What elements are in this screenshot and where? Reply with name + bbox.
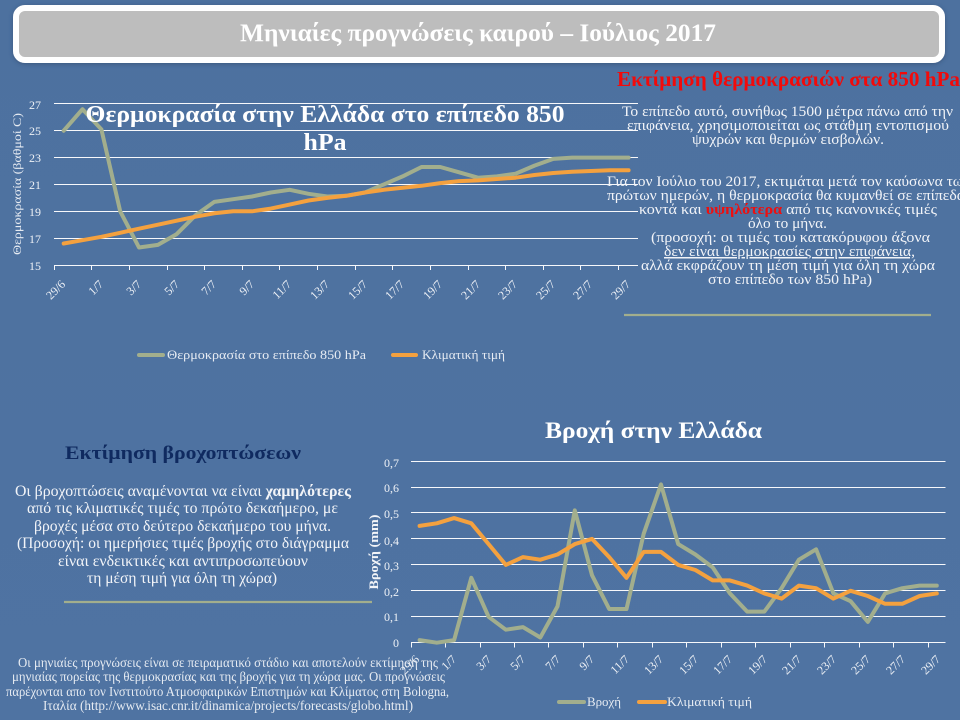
x axis labels: 21/7 — [458, 277, 483, 302]
y axis labels: 0,6 — [384, 481, 399, 495]
description: αλλά εκφράζουν τη μέση τιμή για όλη τη χώρα — [641, 258, 935, 274]
x axis labels: 15/7 — [345, 277, 370, 302]
y axis labels: 0,7 — [384, 456, 399, 470]
y axis labels: 15 — [29, 259, 41, 273]
x axis labels: 9/7 — [236, 277, 257, 298]
rainfall line chart — [366, 418, 946, 709]
x axis labels: 27/7 — [883, 652, 908, 677]
description: (Προσοχή: οι ημερήσιες τιμές βροχής στο διάγραμμα — [17, 535, 349, 552]
x axis labels: 7/7 — [198, 277, 219, 298]
description: στο επίπεδο των 850 hPa) — [708, 272, 872, 288]
description: κοντά και υψηλότερα από τις κανονικές τιμές — [639, 202, 937, 218]
x axis labels: 17/7 — [710, 652, 735, 677]
x axis labels: 19/7 — [745, 652, 770, 677]
chart title: Θερμοκρασία στην Ελλάδα στο επίπεδο 850 — [86, 102, 564, 128]
title banner — [16, 8, 942, 60]
x axis labels: 3/7 — [123, 277, 144, 298]
y axis labels: 19 — [29, 205, 41, 219]
climatological series — [64, 170, 629, 244]
x axis labels: 9/7 — [576, 652, 597, 673]
description: πρώτων ημερών, η θερμοκρασία θα κυμανθεί σε επίπεδα — [607, 188, 960, 204]
chart title: Βροχή στην Ελλάδα — [545, 418, 762, 443]
chart title: hPa — [304, 130, 346, 156]
x axis labels: 11/7 — [269, 277, 294, 302]
x axis labels — [43, 277, 633, 302]
x axis labels: 19/7 — [420, 277, 445, 302]
description: Το επίπεδο αυτό, συνήθως 1500 μέτρα πάνω από την — [622, 104, 953, 120]
x axis labels: 11/7 — [607, 652, 632, 677]
x axis labels: 23/7 — [495, 277, 520, 302]
y axis labels: 0 — [393, 636, 399, 650]
title banner: Μηνιαίες προγνώσεις καιρού – Ιούλιος 2017 — [240, 20, 716, 47]
description: επιφάνεια, χρησιμοποιείται ως στάθμη εντοπισμού — [627, 118, 949, 134]
legend — [559, 694, 752, 709]
x axis labels: 1/7 — [85, 277, 106, 298]
heading: Εκτίμηση βροχοπτώσεων — [65, 443, 302, 464]
description: από τις κλιματικές τιμές το πρώτο δεκαήμερο, με — [27, 500, 338, 517]
y axis labels: 0,1 — [384, 610, 399, 624]
y axis labels: 21 — [29, 178, 41, 192]
y axis labels: 0,3 — [384, 559, 399, 573]
panel: 850 hPa estimate text — [607, 67, 960, 288]
temperature series — [64, 109, 629, 248]
x axis labels: 27/7 — [570, 277, 595, 302]
y axis labels: 0,4 — [384, 534, 399, 548]
legend: Βροχή — [587, 694, 621, 709]
x axis labels: 29/7 — [608, 277, 633, 302]
climatological series — [420, 518, 937, 604]
x axis labels: 13/7 — [641, 652, 666, 677]
x axis labels: 17/7 — [382, 277, 407, 302]
legend: Κλιματική τιμή — [422, 348, 505, 362]
x axis labels: 5/7 — [507, 652, 528, 673]
description: βροχές μέσα στο δεύτερο δεκαήμερο του μήνα. — [34, 518, 331, 535]
legend — [139, 348, 505, 362]
rainfall series — [420, 484, 937, 643]
y axis labels: 27 — [29, 98, 41, 112]
y axis labels: 0,2 — [384, 585, 399, 599]
x axis labels: 29/6 — [43, 277, 68, 302]
y axis labels — [384, 456, 399, 650]
description: όλο το μήνα. — [748, 216, 827, 232]
y axis labels — [29, 98, 41, 273]
description — [607, 104, 960, 288]
heading: Εκτίμηση θερμοκρασιών στα 850 hPa — [617, 67, 960, 91]
x axis labels: 5/7 — [161, 277, 182, 298]
legend: Θερμοκρασία στο επίπεδο 850 hPa — [167, 348, 367, 362]
x axis labels: 21/7 — [779, 652, 804, 677]
description: ψυχρών και θερμών εισβολών. — [692, 132, 884, 148]
description: τη μέση τιμή για όλη τη χώρα) — [87, 570, 277, 587]
footnote: Οι μηνιαίες προγνώσεις είναι σε πειραματικό στάδιο και αποτελούν εκτίμηση της — [18, 655, 439, 670]
footnote: παρέχονται απο τον Ινστιτούτο Ατμοσφαιρικών Επιστημών και Κλίματος στη Bologna, — [6, 684, 449, 699]
description: (προσοχή: οι τιμές του κατακόρυφου άξονα — [651, 230, 930, 246]
x axis labels: 25/7 — [533, 277, 558, 302]
legend: Κλιματική τιμή — [667, 694, 752, 709]
temperature line chart — [12, 98, 638, 362]
y axis title: Θερμοκρασία (βαθμοί C) — [12, 113, 24, 255]
y axis labels: 25 — [29, 124, 41, 138]
chart title — [86, 102, 564, 156]
footnote: Ιταλία (http://www.isac.cnr.it/dinamica/projects/forecasts/globo.html) — [43, 698, 413, 713]
y axis title: Βροχή (mm) — [366, 514, 381, 590]
footnote — [6, 655, 449, 713]
x axis labels: 29/7 — [918, 652, 943, 677]
x axis labels: 1/7 — [438, 652, 459, 673]
x axis labels: 29/6 — [397, 652, 422, 677]
y axis labels: 23 — [29, 151, 41, 165]
description — [15, 483, 351, 587]
x axis labels: 13/7 — [307, 277, 332, 302]
x axis labels: 23/7 — [814, 652, 839, 677]
y axis labels: 0,5 — [384, 507, 399, 521]
footnote: μηνιαίας πορείας της θερμοκρασίας και της βροχής για τη χώρα μας. Οι προγνώσεις — [12, 669, 446, 684]
description: είναι ενδεικτικές και αντιπροσωπεύουν — [58, 553, 308, 570]
description: δεν είναι θερμοκρασίες στην επιφάνεια, — [664, 244, 915, 260]
panel: rainfall estimate text — [15, 443, 351, 587]
y axis labels: 17 — [29, 232, 41, 246]
description: Οι βροχοπτώσεις αναμένονται να είναι χαμηλότερες — [15, 483, 351, 500]
x axis labels: 3/7 — [473, 652, 494, 673]
description: Για τον Ιούλιο του 2017, εκτιμάται μετά τον καύσωνα των — [607, 174, 960, 190]
x axis labels: 25/7 — [848, 652, 873, 677]
x axis labels — [397, 652, 943, 677]
x axis labels: 15/7 — [676, 652, 701, 677]
x axis labels: 7/7 — [542, 652, 563, 673]
